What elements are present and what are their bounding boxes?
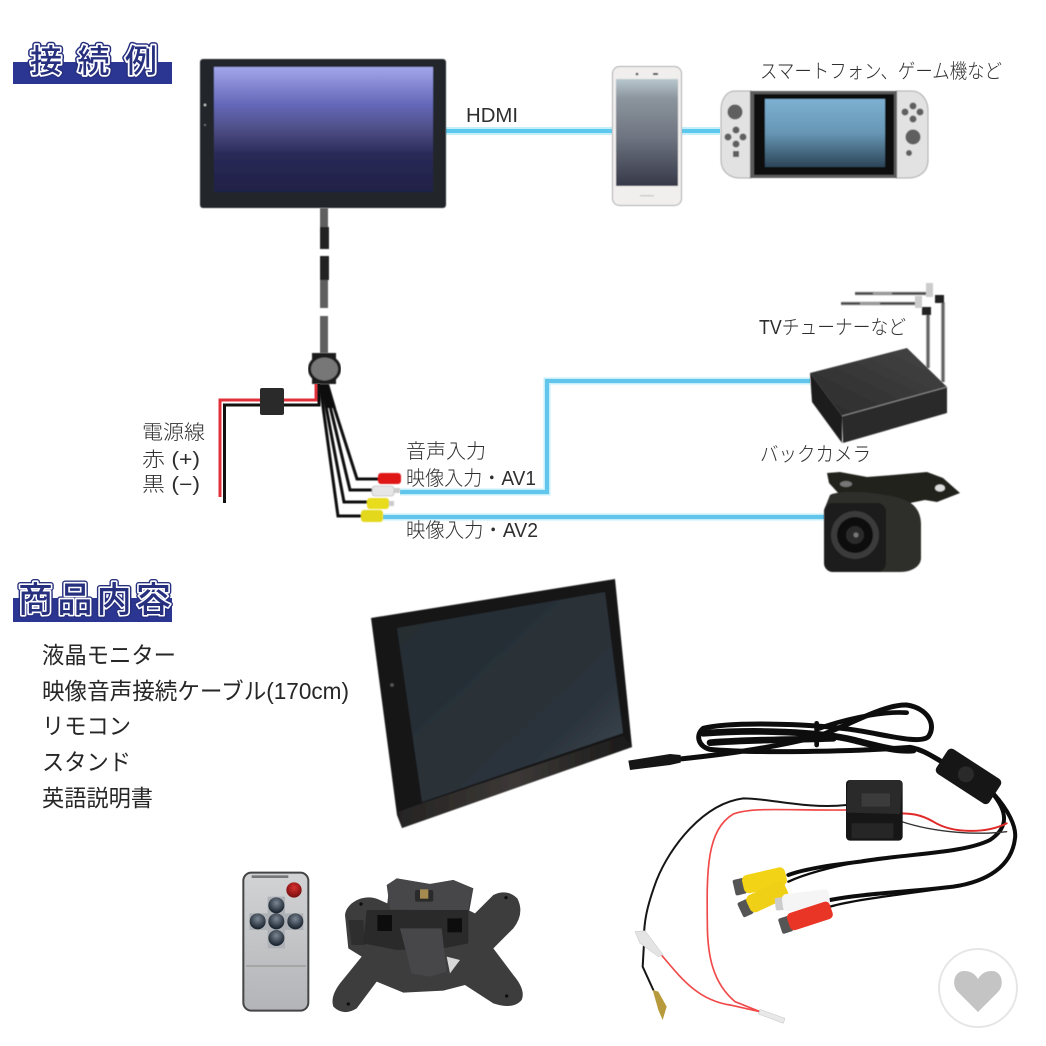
antennas bbox=[841, 283, 944, 382]
cable: AV2 blue line bbox=[383, 514, 824, 520]
list: package contents: 英語説明書 bbox=[42, 785, 153, 811]
RCA plugs bbox=[732, 866, 788, 896]
list: package contents bbox=[42, 642, 349, 811]
power wires bbox=[220, 384, 319, 503]
list: package contents: 液晶モニター bbox=[42, 642, 176, 668]
list: package contents: スタンド bbox=[42, 749, 131, 775]
filter box bbox=[846, 780, 903, 841]
heading: connection example: 接続例 bbox=[30, 43, 157, 79]
device: smartphone bbox=[612, 66, 682, 206]
heading: package contents: 商品内容 bbox=[18, 581, 171, 620]
device: TV tuner box bbox=[810, 348, 947, 443]
label: power wires: 電源線 bbox=[142, 421, 205, 444]
list: package contents: リモコン bbox=[42, 713, 131, 739]
heading: connection example: 接続例 bbox=[30, 43, 157, 79]
thin wires bbox=[643, 798, 1007, 1012]
cable bundle bbox=[680, 705, 1015, 907]
label: video input AV1: 映像入力・AV1 bbox=[406, 467, 536, 490]
device: game console bbox=[721, 91, 928, 178]
label: video input AV2: 映像入力・AV2 bbox=[406, 519, 538, 542]
cable: video trunk bbox=[320, 208, 329, 353]
list: package contents: 映像音声接続ケーブル(170cm) bbox=[42, 678, 349, 704]
favorite heart button bbox=[939, 949, 1017, 1027]
cable: HDMI blue line bbox=[446, 127, 720, 135]
label: smartphone, game console: スマートフォン、ゲーム機など bbox=[760, 60, 1002, 83]
plug bbox=[628, 754, 681, 770]
label: audio input: 音声入力 bbox=[406, 440, 486, 463]
RCA wires and plugs bbox=[320, 384, 401, 522]
cable: AV1 blue line bbox=[400, 381, 810, 492]
wire terminals bbox=[635, 931, 663, 957]
monitor: top bbox=[200, 59, 446, 208]
junction bbox=[934, 747, 1003, 806]
product: LCD monitor bbox=[371, 579, 632, 828]
product: video and audio cable bbox=[628, 705, 1015, 1023]
label: TV tuner: TVチューナーなど bbox=[759, 317, 906, 339]
label: HDMI: HDMI bbox=[466, 105, 518, 127]
label: power wires bbox=[142, 421, 205, 496]
device: back camera bbox=[824, 472, 960, 572]
label: power wires: 赤 (+) bbox=[142, 448, 200, 471]
connector hub bbox=[310, 353, 340, 384]
product: remote control bbox=[243, 873, 308, 1011]
heading: package contents: 商品内容 bbox=[18, 581, 171, 620]
label: power wires: 黒 (−) bbox=[142, 474, 200, 496]
product: stand bbox=[332, 878, 523, 1012]
label: back camera: バックカメラ bbox=[760, 444, 871, 466]
